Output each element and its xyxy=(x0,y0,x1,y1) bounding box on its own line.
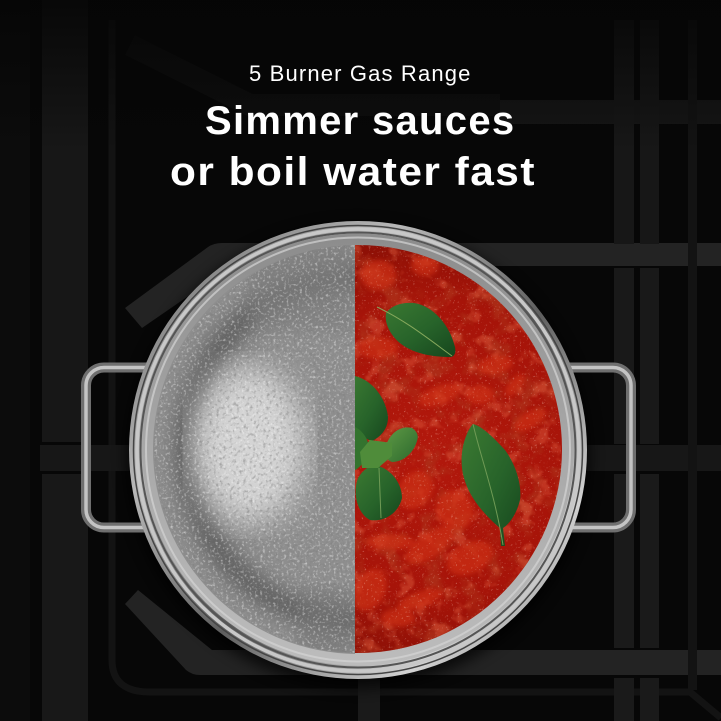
heading block xyxy=(170,61,536,194)
icon: left pot handle xyxy=(86,368,176,528)
tomato sauce half of the pot xyxy=(355,245,562,653)
icon: right pot handle xyxy=(541,368,631,528)
pot rim xyxy=(129,221,587,679)
water half of the pot xyxy=(153,245,355,654)
basil sprig xyxy=(350,376,418,520)
title line 2: or boil water fast xyxy=(170,150,536,194)
pot shadow xyxy=(126,224,590,688)
title line 1: Simmer sauces xyxy=(205,99,515,143)
basil leaf: top xyxy=(377,303,455,357)
subtitle: 5 Burner Gas Range xyxy=(249,61,471,86)
basil leaf: right xyxy=(462,424,520,546)
